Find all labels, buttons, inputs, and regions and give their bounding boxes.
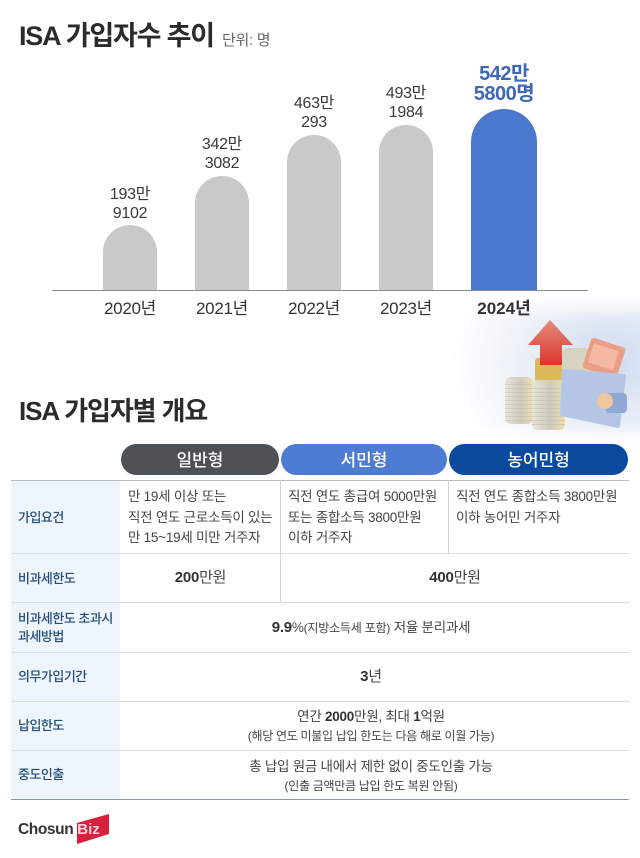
- year 2021: 2021년: [196, 299, 248, 318]
- eligibility farmer: [456, 489, 617, 524]
- eligibility general: 만 19세 이상 또는: [128, 489, 226, 504]
- pill: low-income type: [281, 444, 447, 475]
- left coin stack: [505, 377, 533, 424]
- banknotes: [582, 337, 626, 379]
- illustration: coins, wallet and up arrow: [479, 304, 640, 434]
- bar 2021: [195, 176, 249, 290]
- arrow: [528, 320, 573, 365]
- withdrawal text: (인출 금액만큼 납입 한도 복원 안됨): [285, 779, 457, 793]
- taxation text: 9.9%(지방소득세 포함) 저율 분리과세: [272, 619, 470, 636]
- value 2021: 342만: [202, 136, 242, 153]
- tax-free limit general: 200만원: [175, 569, 226, 586]
- payment limit text: [248, 709, 494, 743]
- value 2020: 9102: [113, 205, 147, 222]
- tax-free limit others: 400만원: [429, 569, 481, 586]
- year 2022: 2022년: [288, 299, 340, 318]
- year 2023: 2023년: [380, 299, 432, 318]
- row label: mid-term withdrawal: 중도인출: [18, 767, 64, 782]
- logo red flag: [77, 814, 109, 844]
- value 2024: 5800명: [474, 83, 534, 105]
- value 2023: 493만: [386, 85, 426, 102]
- row label: eligibility: 가입요건: [18, 510, 64, 525]
- row label: taxation above limit: [18, 611, 113, 644]
- eligibility general: [128, 489, 272, 545]
- pill: farmer and fisher type: 농어민형: [507, 451, 570, 470]
- centre coin stack: [532, 380, 565, 430]
- eligibility low-income: 직전 연도 총급여 5000만원: [288, 489, 437, 504]
- label column background: [11, 480, 120, 799]
- row label: payment limit: 납입한도: [18, 718, 64, 733]
- value 2021: [202, 136, 242, 172]
- bar 2022: [287, 135, 341, 290]
- gold coins: [535, 358, 563, 382]
- value 2022: [294, 94, 334, 131]
- withdrawal text: 총 납입 원금 내에서 제한 없이 중도인출 가능: [249, 759, 493, 774]
- value 2022: 293: [301, 114, 327, 131]
- eligibility low-income: [288, 489, 437, 545]
- row label: taxation above limit: 비과세한도 초과시: [18, 611, 113, 626]
- value 2020: 193만: [110, 186, 150, 203]
- logo wordmark: Chosun Biz: [18, 821, 100, 838]
- eligibility farmer: 이하 농어민 거주자: [456, 510, 560, 524]
- bar 2024 highlighted: [471, 109, 537, 290]
- unit note: 단위: 명: [222, 32, 270, 49]
- pill: low-income type: 서민형: [341, 451, 387, 470]
- bar chart: [52, 63, 588, 318]
- value 2024: 542만: [479, 63, 529, 85]
- eligibility low-income: 이하 거주자: [288, 530, 352, 545]
- payment limit text: (해당 연도 미불입 납입 한도는 다음 해로 이월 가능): [248, 729, 494, 743]
- value 2021: 3082: [205, 155, 239, 172]
- heading: ISA overview by subscriber type: ISA 가입자별 개요: [19, 396, 207, 426]
- eligibility low-income: 또는 종합소득 3800만원: [288, 510, 421, 524]
- withdrawal text: [249, 759, 493, 793]
- bar 2020: [103, 225, 157, 290]
- logo: ChosunBiz: [18, 814, 109, 844]
- eligibility general: 만 15~19세 미만 거주자: [128, 530, 260, 545]
- value 2022: 463만: [294, 95, 334, 112]
- payment limit text: 연간 2000만원, 최대 1억원: [297, 709, 445, 724]
- value 2020: [110, 186, 150, 222]
- pill: general type: 일반형: [177, 451, 223, 470]
- year 2020: 2020년: [104, 299, 156, 318]
- eligibility farmer: 직전 연도 종합소득 3800만원: [456, 489, 617, 504]
- row label: tax-free limit: 비과세한도: [18, 571, 75, 586]
- wallet: [562, 371, 627, 426]
- value 2024: [474, 63, 534, 105]
- eligibility general: 직전 연도 근로소득이 있는: [128, 510, 272, 524]
- row label: taxation above limit: 과세방법: [18, 629, 64, 644]
- title: ISA subscribers trend: ISA 가입자수 추이: [19, 21, 214, 51]
- value 2023: 1984: [389, 104, 423, 121]
- comparison table: [11, 480, 629, 800]
- year 2024: 2024년: [477, 299, 531, 318]
- pill: general type: [121, 444, 279, 475]
- pill: farmer and fisher type: [449, 444, 628, 475]
- value 2023: [386, 84, 426, 121]
- axis line: [52, 290, 588, 291]
- bar 2023: [379, 125, 433, 290]
- row label: mandatory period: 의무가입기간: [18, 669, 87, 684]
- back coin stack: [562, 348, 590, 378]
- period text: 3년: [360, 668, 382, 685]
